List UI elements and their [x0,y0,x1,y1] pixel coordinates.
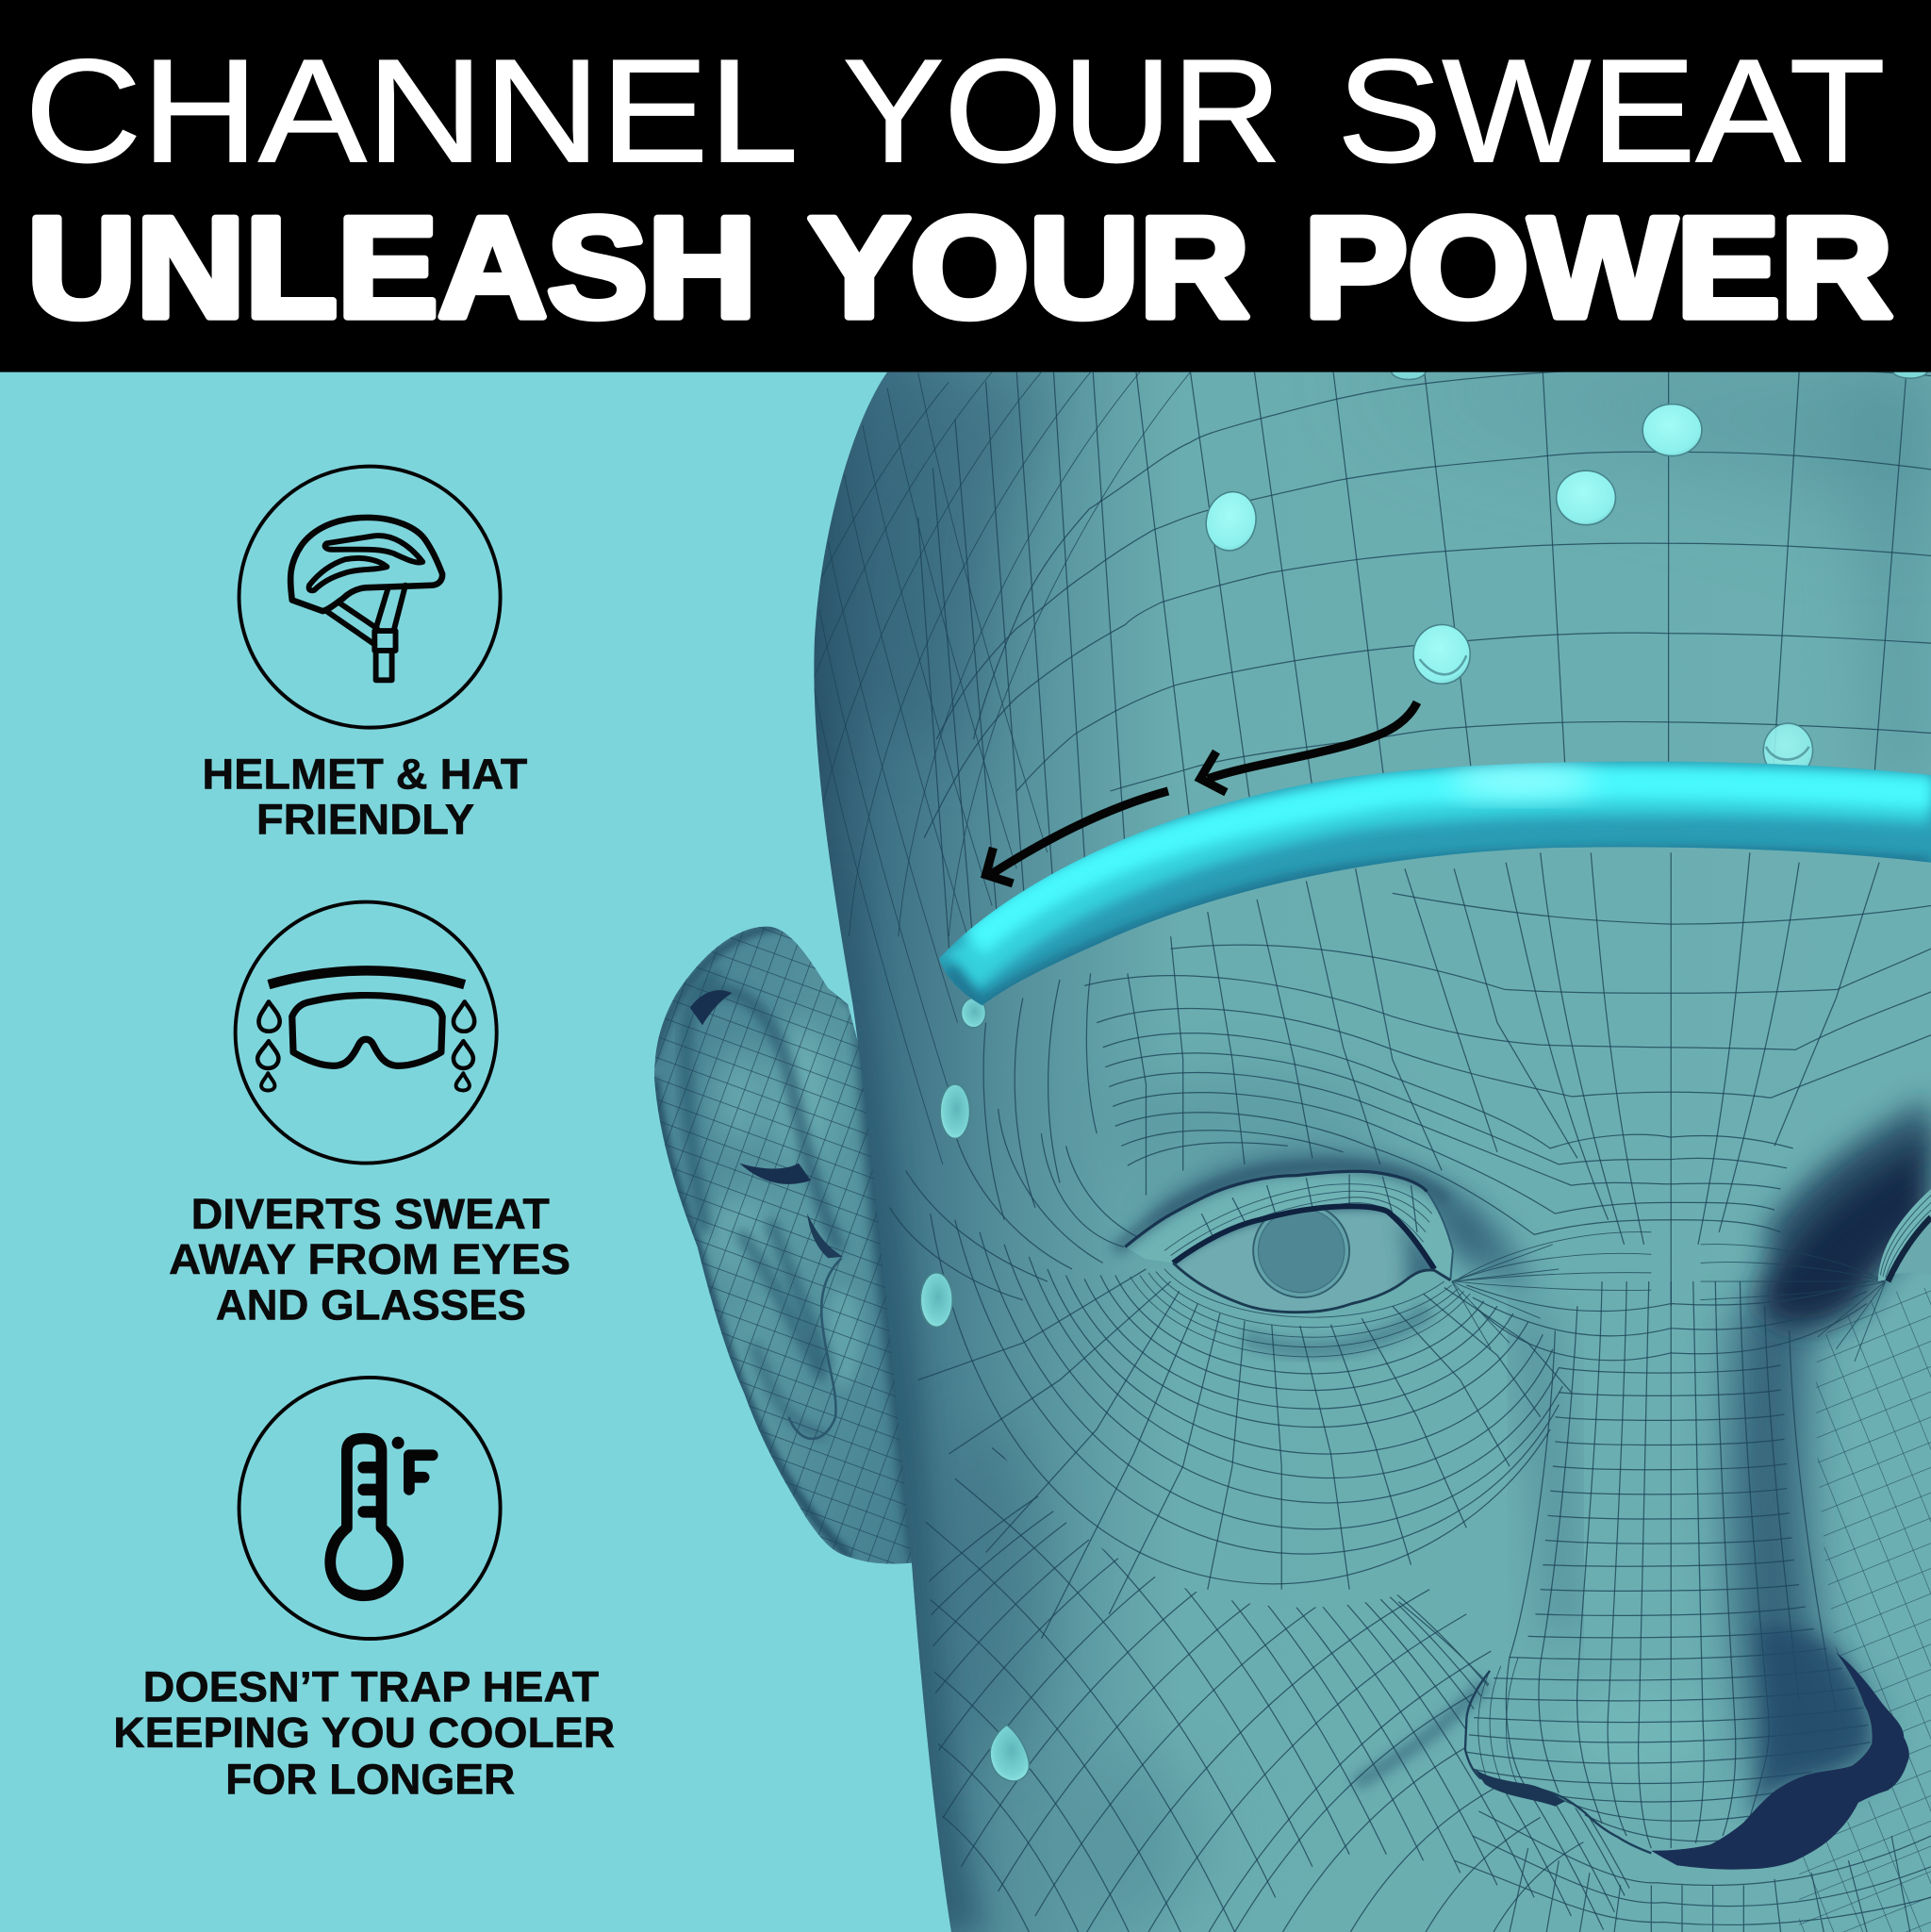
cheek mesh [926,1447,1629,1932]
label: helmet and hat friendly [202,750,527,844]
label: diverts sweat away from eyes and glasses: AWAY FROM EYES [169,1235,570,1283]
sweat droplets [920,362,1927,1781]
title line 1: SWEAT [1337,28,1886,192]
nose tip highlight [1571,1684,1707,1778]
nose [1465,1281,1909,1870]
nose right shade [1729,1306,1871,1787]
feature: helmet and hat friendly [202,467,527,844]
feature: diverts sweat [169,902,570,1329]
label: diverts sweat away from eyes and glasses: DIVERTS SWEAT [191,1190,550,1238]
soft shading [807,372,1931,1932]
label: doesn't trap heat keeping you cooler for longer: DOESN’T TRAP HEAT [143,1663,599,1711]
label: diverts sweat away from eyes and glasses [169,1190,570,1329]
title line 1: CHANNEL [25,28,799,192]
face [707,363,1931,1932]
label: helmet and hat friendly: HELMET & HAT [202,750,527,798]
label: doesn't trap heat keeping you cooler for longer: KEEPING YOU COOLER [113,1709,615,1757]
arrow: upper [1200,702,1417,792]
nose left shade [1528,1306,1562,1639]
nose shadow on tip [1743,1627,1872,1823]
icon: goggles with sweat drops [236,902,497,1164]
title line 1: YOUR [843,28,1281,192]
label: doesn't trap heat keeping you cooler for longer: FOR LONGER [225,1756,515,1804]
icon: thermometer [239,1378,501,1639]
title line 2: UNLEASH [27,189,756,348]
arrows [986,702,1417,883]
upper eyelid [1115,1165,1453,1280]
brow inner shade [1442,1189,1528,1294]
brow mesh [983,852,1931,1306]
title bar [0,0,1931,372]
eye ring mesh [890,1109,1886,1639]
right eye [1878,1189,1931,1281]
eyeball [1171,1204,1450,1313]
label: doesn't trap heat keeping you cooler for longer [113,1663,615,1804]
icon: helmet [239,467,501,728]
under-nose mesh [1454,1811,1931,1932]
title line 2: POWER [1304,189,1892,348]
title line 2 [27,189,1892,348]
feature: does not trap heat [113,1378,615,1804]
nose mesh [1466,1281,1871,1848]
right eye socket shadow [1756,1128,1931,1329]
ear [653,912,924,1577]
nostril wing crease [1465,1671,1651,1853]
arrow: lower [986,791,1168,883]
headband [939,762,1931,1005]
title line 1 [25,28,1886,192]
label: diverts sweat away from eyes and glasses: AND GLASSES [216,1281,526,1329]
label: helmet and hat friendly: FRIENDLY [256,796,474,844]
head with wireframe mesh [653,363,1931,1932]
title line 2: YOUR [808,189,1249,348]
nose underside shadow [1651,1652,1909,1870]
right cheek mesh [1799,1281,1931,1932]
nasolabial crease [1356,1683,1485,1784]
forehead mesh [707,368,1931,1164]
